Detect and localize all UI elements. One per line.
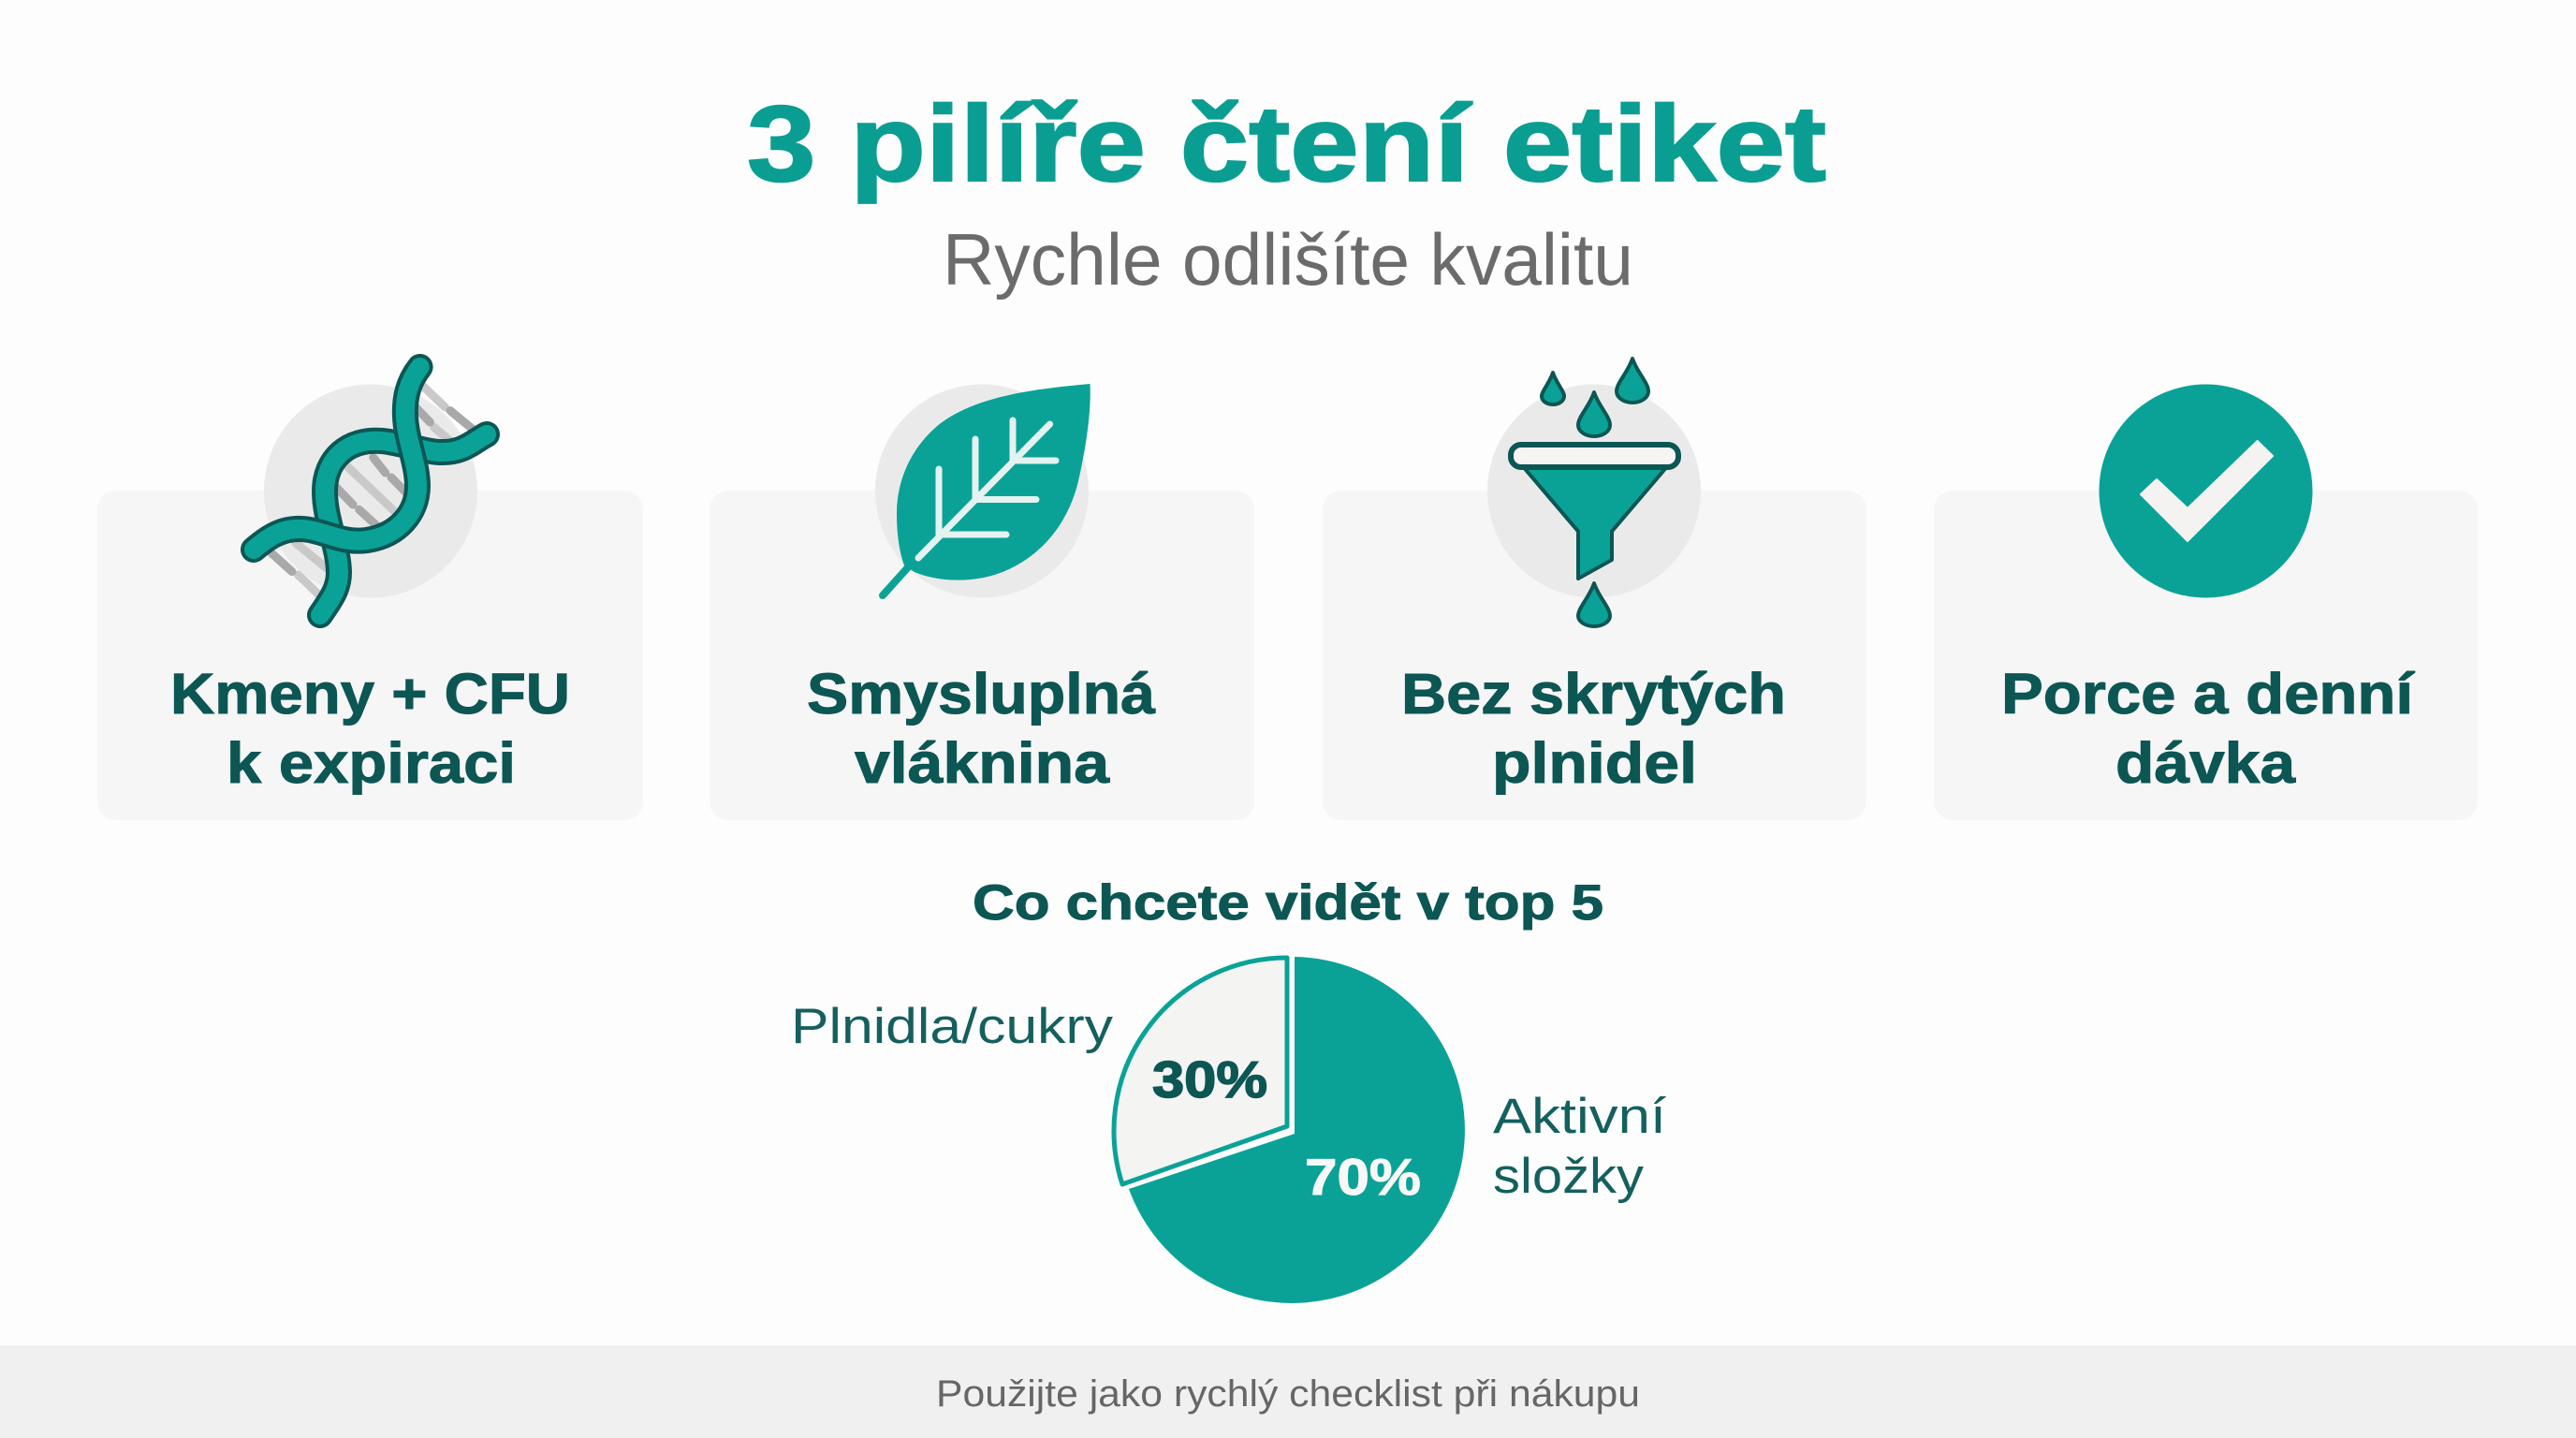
label: active ingredients xyxy=(1493,1089,1666,1204)
footer bar xyxy=(0,1345,2576,1438)
subtitle: Rychle odlišíte kvalitu xyxy=(943,218,1633,301)
panel: meaningful fibre xyxy=(710,384,1254,820)
label: meaningful fibre xyxy=(807,662,1156,795)
panel: no hidden fillers xyxy=(1323,359,1866,820)
value: 70%: 70% xyxy=(1305,1148,1421,1206)
label: serving and daily dose xyxy=(2001,662,2415,795)
label: no hidden fillers: plnidel xyxy=(1492,731,1697,795)
label: no hidden fillers: Bez skrytých xyxy=(1401,662,1786,726)
label: meaningful fibre: vláknina xyxy=(855,731,1110,795)
icon: DNA helix xyxy=(254,367,487,615)
label: strains and CFU xyxy=(170,662,570,795)
label: active ingredients: Aktivní xyxy=(1493,1089,1666,1144)
icon: funnel with drops xyxy=(1487,359,1701,626)
panel: serving and daily dose xyxy=(1934,384,2478,820)
label: fillers and sugars: Plnidla/cukry xyxy=(791,999,1114,1054)
title: 3 pilíře čtení etiket xyxy=(747,84,1826,204)
label: serving and daily dose: dávka xyxy=(2115,731,2296,795)
icon: leaf xyxy=(875,384,1090,597)
label: serving and daily dose: Porce a denní xyxy=(2001,662,2415,726)
label: active ingredients: složky xyxy=(1493,1149,1645,1204)
panel: strains and CFU xyxy=(97,367,643,820)
icon: check mark xyxy=(2099,384,2312,597)
value: 30%: 30% xyxy=(1152,1050,1267,1108)
chart heading: Co chcete vidět v top 5 xyxy=(973,875,1603,931)
label: strains and CFU: k expiraci xyxy=(227,731,516,795)
footer text: Použijte jako rychlý checklist při nákupu xyxy=(936,1373,1640,1415)
slice: active ingredients 70% xyxy=(1129,957,1465,1303)
pie chart xyxy=(1114,957,1465,1303)
slice: fillers and sugars 30% xyxy=(1114,958,1287,1184)
label: strains and CFU: Kmeny + CFU xyxy=(170,662,570,726)
label: no hidden fillers xyxy=(1401,662,1786,795)
label: meaningful fibre: Smysluplná xyxy=(807,662,1156,726)
